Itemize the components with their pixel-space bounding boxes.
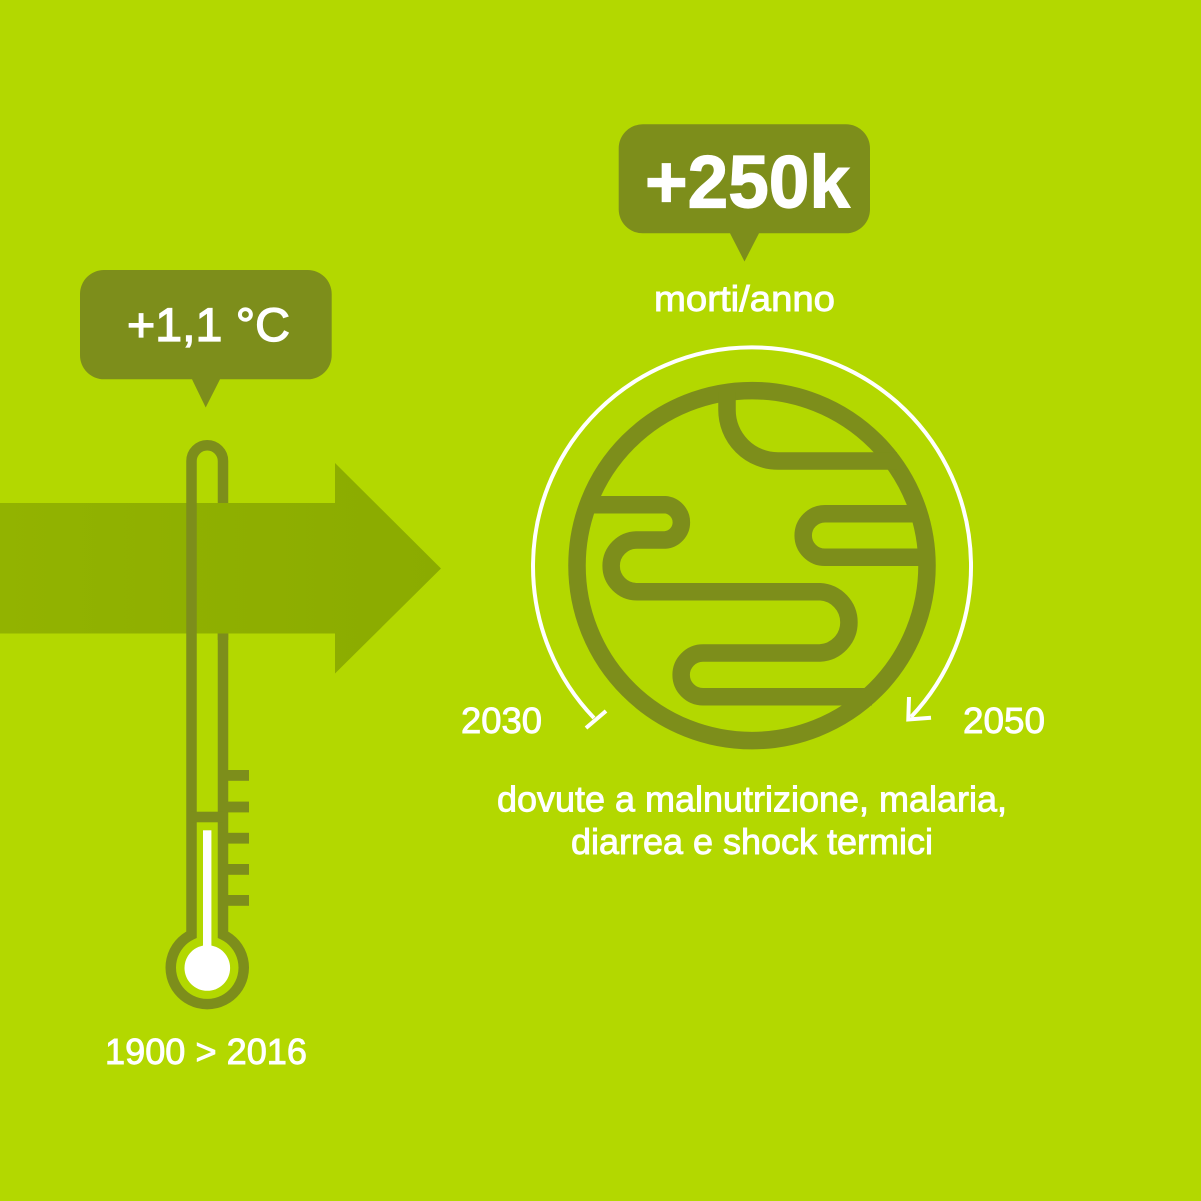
thermometer right wall behind arrow xyxy=(218,461,228,640)
label: deaths per year: morti/anno xyxy=(654,278,835,319)
thermometer level line xyxy=(191,812,223,822)
text block: causes xyxy=(497,779,1007,862)
label: years thermometer: 1900 > 2016 xyxy=(105,1031,307,1072)
arrow: circular timeline xyxy=(533,347,971,728)
text block: causes: dovute a malnutrizione, malaria, xyxy=(497,779,1007,820)
thermometer mercury xyxy=(184,830,230,991)
label: 2050: 2050 xyxy=(963,700,1045,741)
text block: causes: diarrea e shock termici xyxy=(571,821,933,862)
temperature value: +1,1 °C xyxy=(127,298,290,351)
deaths value: +250k xyxy=(645,141,851,224)
thermometer scale ticks xyxy=(226,770,249,906)
icon: globe xyxy=(577,391,928,741)
arrow xyxy=(0,463,441,674)
thermometer outline xyxy=(171,445,244,1004)
callout: deaths xyxy=(619,124,870,262)
label: 2030: 2030 xyxy=(461,700,542,741)
thermometer xyxy=(171,445,249,1004)
callout: temperature xyxy=(80,270,332,408)
